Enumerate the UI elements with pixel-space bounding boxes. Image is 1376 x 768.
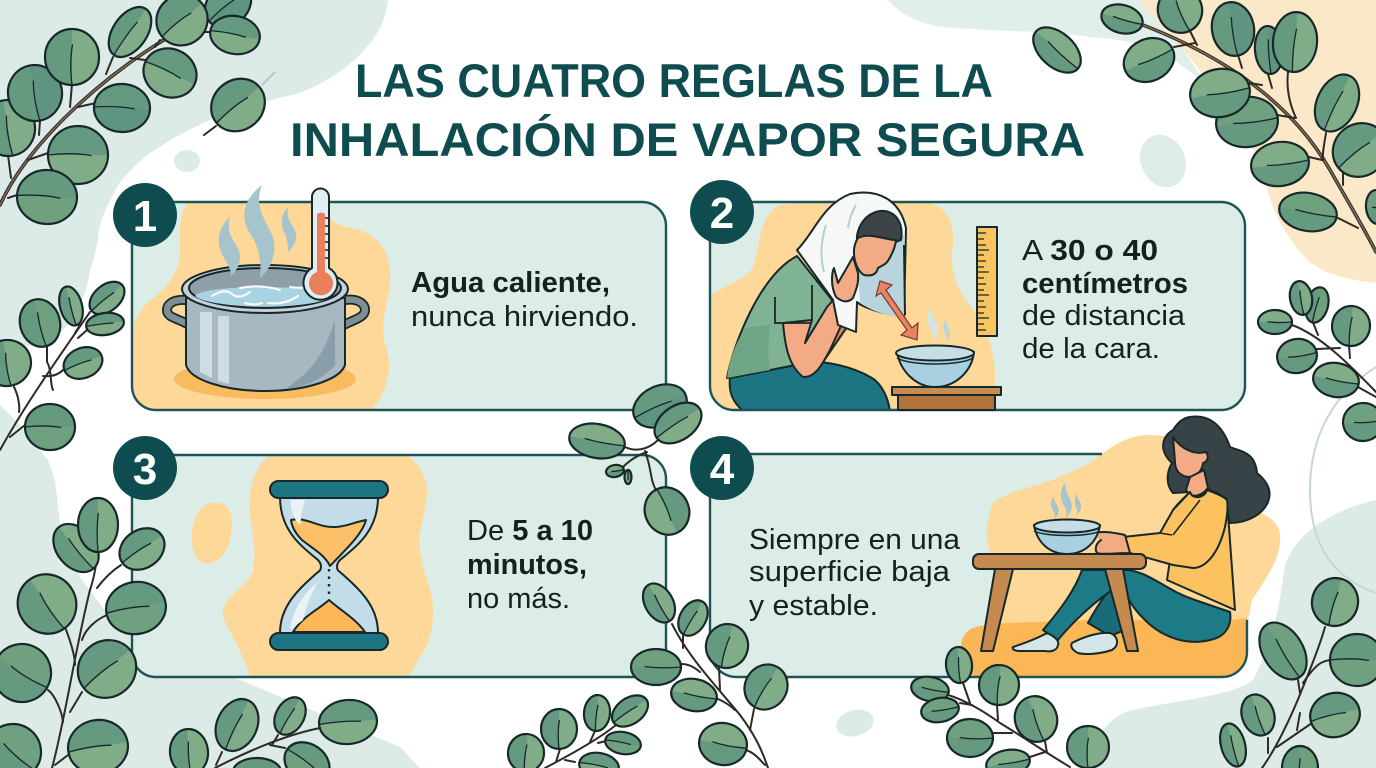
- text: rule 4: Siempre en una: [749, 524, 961, 556]
- text: rule 4: superficie baja: [749, 556, 951, 588]
- number badge 3: [113, 436, 177, 500]
- title: INHALACIÓN DE VAPOR SEGURA: [290, 113, 1085, 166]
- branch: bottom right second sprig: [1216, 573, 1376, 768]
- icon: steam: [927, 306, 950, 344]
- leaf: loose top left: [200, 68, 276, 142]
- number badge 1: [113, 183, 177, 247]
- panel 2: distance: [690, 180, 1245, 412]
- text: rule 1: [411, 267, 638, 333]
- branch: bottom centre eucalyptus: [631, 578, 796, 768]
- branch: centre upper sprig: [566, 376, 709, 542]
- text: rule 4: [749, 524, 961, 622]
- panel 3: time: [113, 436, 666, 677]
- number badge 2: 2: [710, 189, 734, 238]
- branch: mid right eucalyptus: [1258, 279, 1376, 443]
- title: LAS CUATRO REGLAS DE LA: [355, 54, 993, 107]
- number badge 2: [690, 180, 754, 244]
- number badge 4: [690, 436, 754, 500]
- icon: bowl and steam: [1034, 482, 1100, 554]
- panel 1: hot water: [113, 183, 666, 410]
- number badge 3: 3: [133, 445, 157, 494]
- text: rule 2: de distancia: [1022, 300, 1186, 332]
- icon: low table: [973, 554, 1146, 651]
- text: rule 3: De 5 a 10: [467, 515, 593, 547]
- text: rule 3: [467, 515, 593, 615]
- branch: top left eucalyptus: [0, 0, 263, 226]
- icon: bowl on table: [892, 346, 1001, 410]
- text: rule 3: minutos,: [467, 549, 587, 581]
- branch: bottom centre small sprig: [506, 689, 654, 768]
- branch: bottom right first sprig: [909, 646, 1109, 768]
- branch: mid left eucalyptus: [0, 275, 131, 450]
- figure: seated person: [727, 256, 890, 412]
- icon: pot: [167, 265, 365, 399]
- figure: seated woman: [1013, 416, 1270, 654]
- text: rule 1: Agua caliente,: [411, 267, 610, 299]
- branch: top right eucalyptus: [1098, 0, 1376, 252]
- text: rule 2: A 30 o 40: [1022, 235, 1158, 267]
- leaf: loose top centre right: [1025, 19, 1089, 81]
- text: rule 3: no más.: [467, 583, 570, 615]
- arrow: distance: [876, 281, 918, 340]
- icon: thermometer: [304, 188, 338, 300]
- text: rule 2: [1022, 235, 1188, 365]
- number badge 4: 4: [710, 445, 735, 494]
- text: rule 4: y estable.: [749, 590, 878, 622]
- title: [290, 54, 1085, 166]
- text: rule 2: de la cara.: [1022, 333, 1160, 365]
- figure: towel and head: [797, 192, 906, 332]
- text: rule 1: nunca hirviendo.: [411, 301, 638, 333]
- text: rule 2: centímetros: [1022, 268, 1188, 300]
- icon: hourglass: [270, 481, 388, 650]
- panel 4: stable surface: [690, 416, 1280, 677]
- icon: ruler: [977, 227, 997, 336]
- icon: steam: [219, 185, 296, 278]
- number badge 1: 1: [133, 192, 157, 241]
- branch: bottom left eucalyptus: [0, 498, 173, 768]
- branch: bottom left second sprig: [168, 692, 379, 768]
